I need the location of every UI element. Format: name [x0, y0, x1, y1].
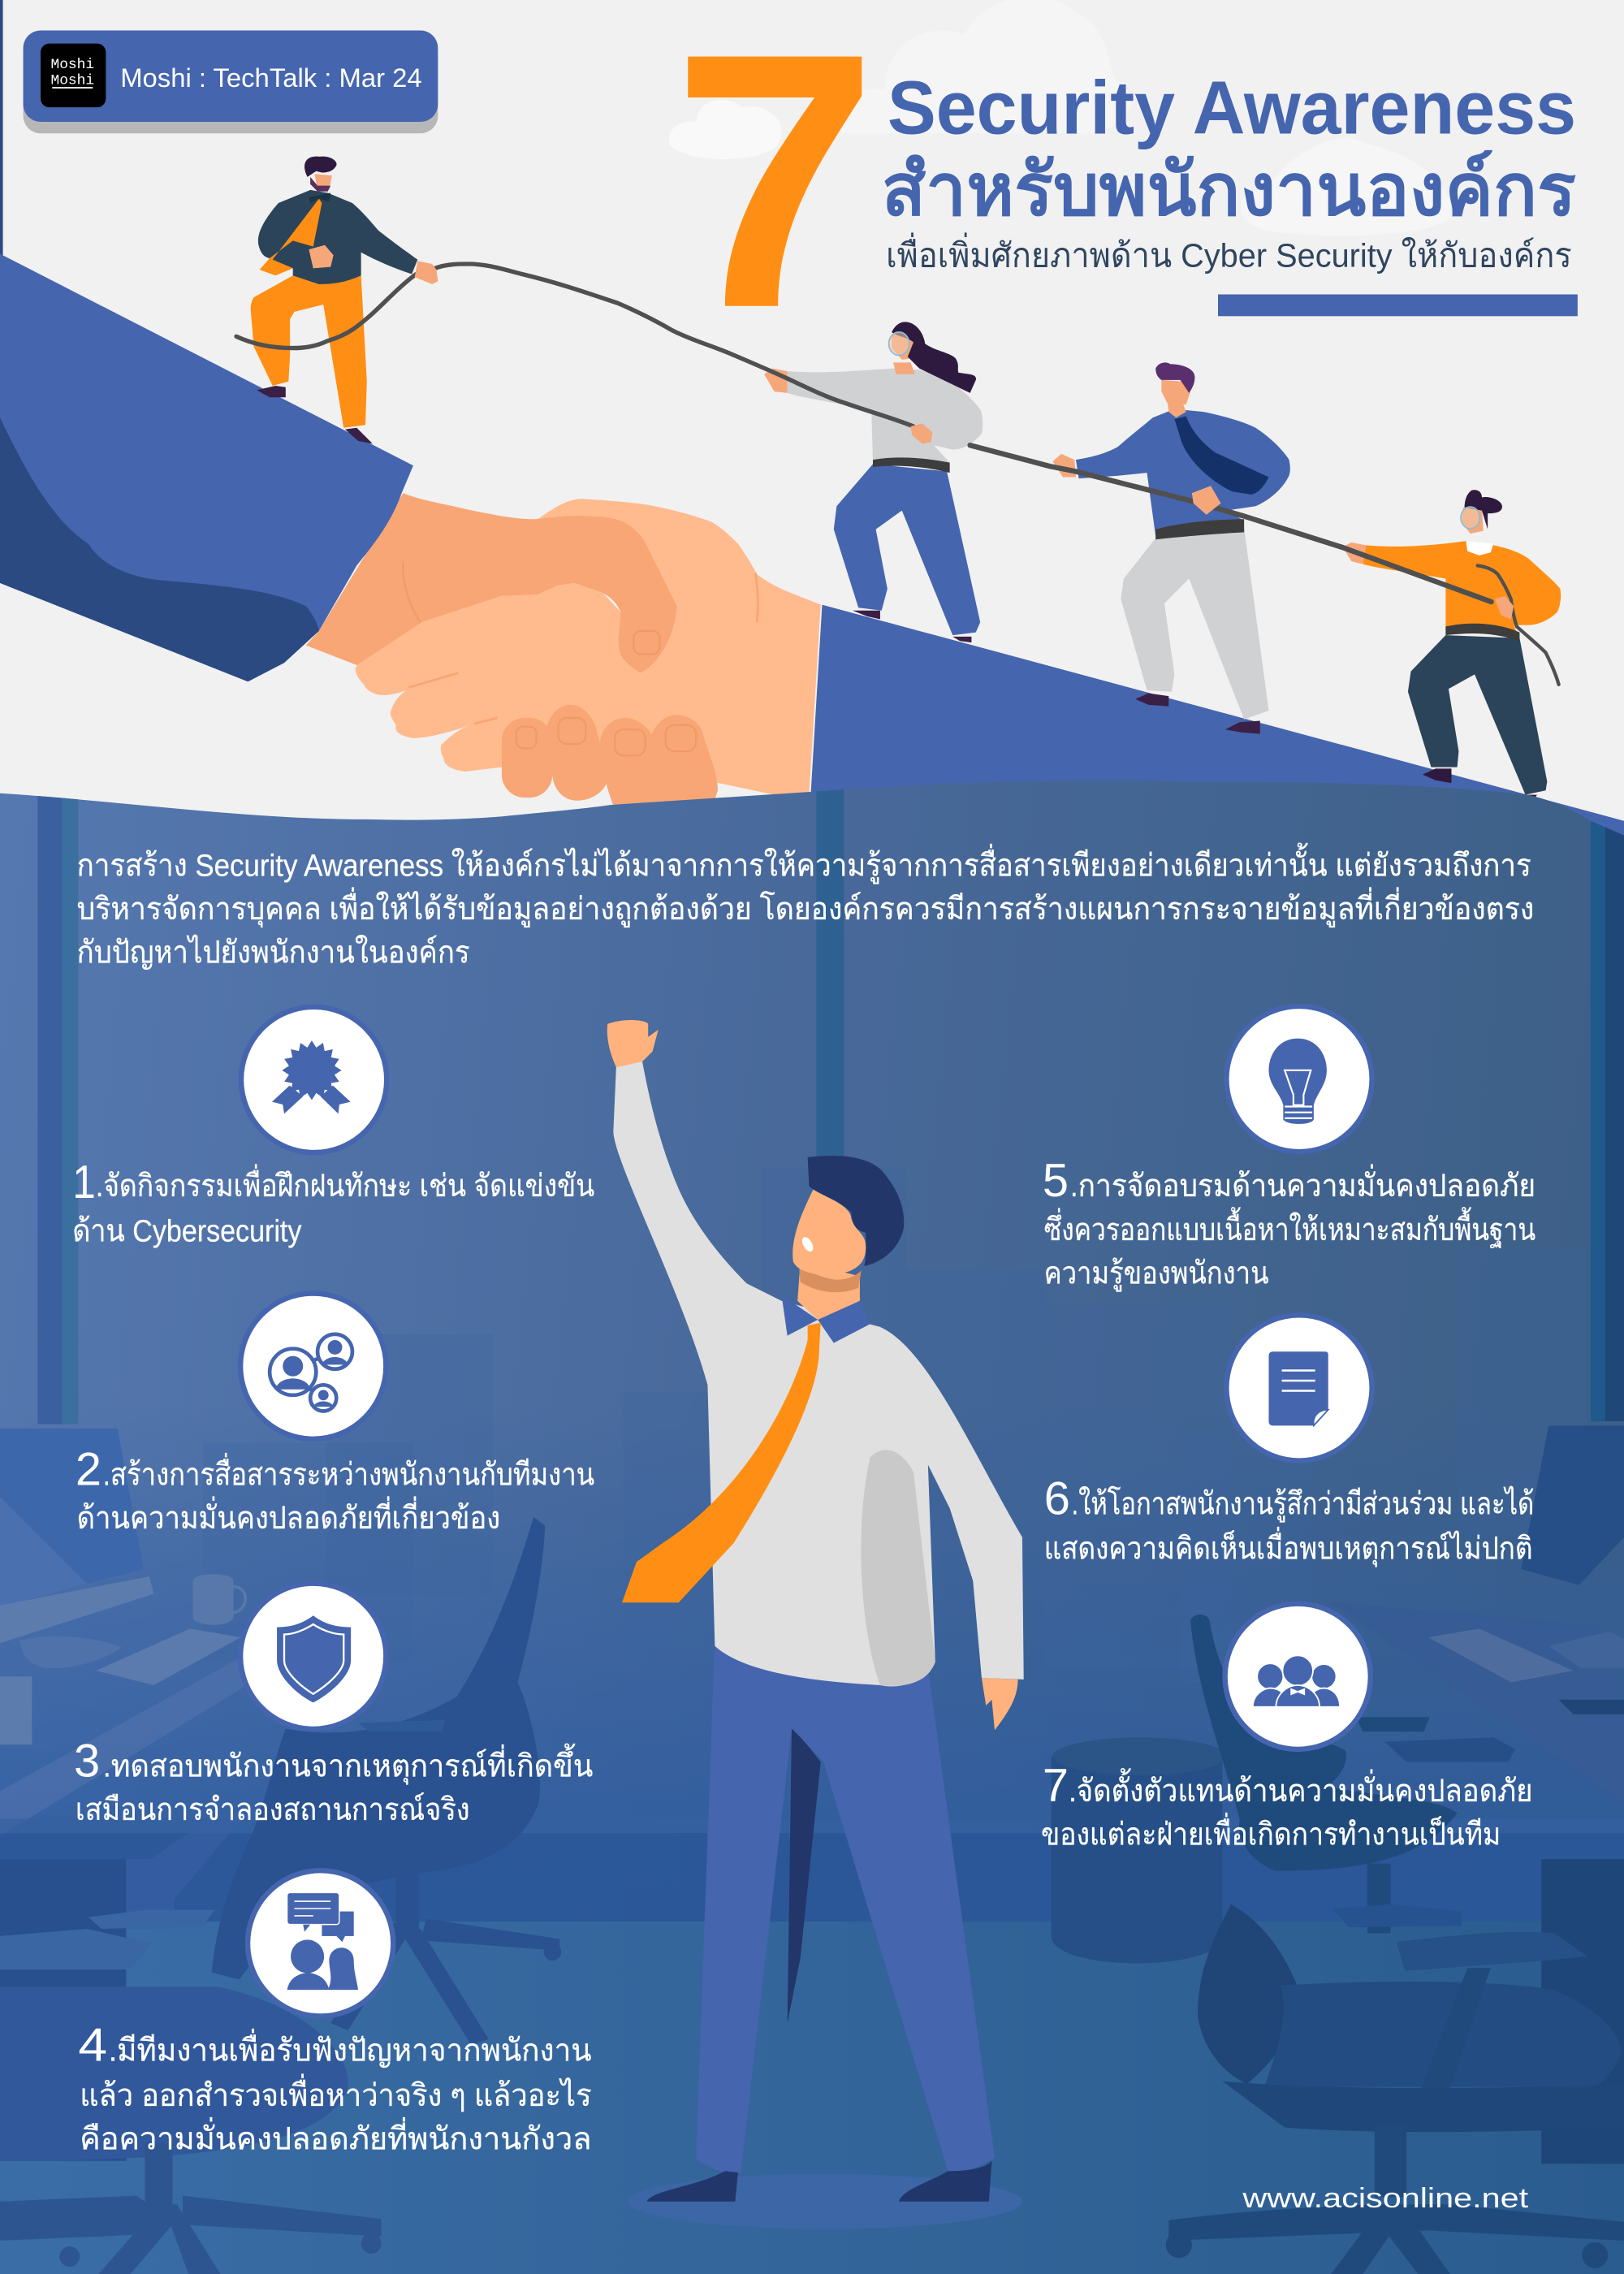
faded background blocks	[203, 1168, 1587, 1682]
website url: www.acisonline.net	[1242, 2183, 1529, 2214]
icon: document	[1226, 1315, 1372, 1461]
wall gradient	[0, 780, 1624, 1922]
figure: man with beard on the left sleeve	[251, 157, 417, 443]
raised fist	[607, 1020, 659, 1067]
text: item 3: .ทดสอบพนักงานจากเหตุการณ์ที่เกิดขึ้น	[103, 1744, 593, 1785]
text: item 1: 1	[72, 1156, 96, 1208]
badge text: Moshi : TechTalk : Mar 24	[120, 63, 422, 93]
text: item 2	[76, 1444, 594, 1536]
figure: man in blue shirt with bag	[1052, 362, 1290, 734]
title: เพื่อเพิ่มศักยภาพด้าน Cyber Security ให้กับองค์กร	[886, 233, 1572, 275]
figure: woman in orange shirt	[1343, 490, 1561, 799]
wall-floor bands	[0, 1819, 28, 1833]
text: item 1	[72, 1156, 594, 1249]
text: item 5: ซึ่งควรออกแบบเนื้อหาให้เหมาะสมกับพื้นฐาน	[1044, 1207, 1535, 1248]
chair D, right bottom	[1166, 1904, 1624, 2274]
text: item 5: .การจัดอบรมด้านความมั่นคงปลอดภัย	[1070, 1164, 1535, 1204]
rope	[236, 264, 1559, 685]
icon: team of three	[1225, 1604, 1371, 1749]
title	[882, 65, 1576, 275]
text: item 5: ความรู้ของพนักงาน	[1044, 1256, 1269, 1291]
title: สำหรับพนักงานองค์กร	[882, 149, 1576, 230]
icon: connected people	[240, 1293, 386, 1439]
text: item 4: 4	[78, 2020, 107, 2072]
icon: light bulb	[1226, 1006, 1372, 1152]
shoes	[646, 2161, 991, 2202]
chair A, left middle	[0, 1517, 561, 2045]
text: item 4	[78, 2019, 592, 2156]
lower hand	[982, 1678, 1018, 1730]
inner leg shadow	[788, 1729, 821, 2023]
floor	[0, 1922, 1624, 2274]
text: item 4: แล้ว ออกสำรวจเพื่อหาว่าจริง ๆ แล้วอะไร	[80, 2073, 592, 2113]
left desk scene	[0, 1429, 247, 1819]
left sleeve	[0, 253, 413, 681]
text: item 7	[1041, 1760, 1533, 1852]
chair B, bottom left	[0, 1987, 382, 2274]
dark desk blocks	[0, 1859, 126, 2161]
figure hands holding rope	[309, 245, 1514, 619]
text: item 1: ด้าน Cybersecurity	[72, 1214, 302, 1249]
text: item 2: ด้านความมั่นคงปลอดภัยที่เกี่ยวข้อง	[77, 1496, 500, 1536]
face	[793, 1189, 866, 1276]
text: item 2: .สร้างการสื่อสารระหว่างพนักงานกับทีมงาน	[103, 1453, 594, 1493]
text: item 6: แสดงความคิดเห็นเมื่อพบเหตุการณ์ไม่ปกติ	[1044, 1527, 1533, 1567]
badge shadow	[24, 42, 438, 133]
text: item 5	[1043, 1155, 1535, 1291]
badge background	[24, 31, 438, 122]
text: item 7: 7	[1043, 1760, 1069, 1812]
hand: fingers	[502, 631, 718, 812]
text: item 4: .มีทีมงานเพื่อรับฟังปัญหาจากพนักงาน	[109, 2028, 592, 2068]
icon: award ribbon	[241, 1007, 387, 1152]
collar	[781, 1295, 870, 1343]
figure: main man raising fist	[607, 1020, 1024, 2202]
text: item 6	[1044, 1472, 1534, 1567]
intro text	[77, 843, 1534, 971]
trousers	[696, 1636, 995, 2173]
icon: shield	[240, 1584, 386, 1729]
text: item 3: เสมือนการจำลองสถานการณ์จริง	[76, 1792, 470, 1827]
text: item 1: .จัดกิจกรรมเพื่อฝึกฝนทักษะ เช่น จัดแข่งขัน	[96, 1164, 594, 1204]
columns	[37, 768, 63, 1424]
intro text: บริหารจัดการบุคคล เพื่อให้ได้รับข้อมูลอย่างถูกต้องด้วย โดยองค์กรควรมีการสร้างแผนการกระจายข้อมูลที่เกี่ยวข้องตรง	[77, 887, 1534, 927]
neck	[797, 1262, 860, 1323]
shirt	[613, 1061, 1024, 1686]
text: item 4: คือความมั่นคงปลอดภัยที่พนักงานกังวล	[80, 2116, 592, 2156]
tie	[622, 1323, 821, 1602]
figure: woman in grey sweater	[764, 322, 983, 642]
logo	[41, 44, 106, 107]
text: item 2: 2	[76, 1444, 102, 1496]
text: item 7: .จัดตั้งตัวแทนด้านความมั่นคงปลอดภัย	[1069, 1768, 1533, 1809]
panel: lower blue office background	[0, 768, 1624, 2274]
intro text: กับปัญหาไปยังพนักงานในองค์กร	[77, 935, 470, 971]
shirt shadow	[861, 1450, 935, 1686]
title: Security Awareness	[888, 65, 1576, 149]
text: item 6: 6	[1044, 1472, 1070, 1524]
background clouds	[669, 0, 1451, 236]
right desk scene	[1428, 1426, 1624, 1714]
hand: back hand, darker	[306, 493, 677, 673]
right sleeve	[806, 605, 1624, 870]
chair C, right middle	[1190, 1615, 1515, 1933]
logo: Moshi	[51, 73, 94, 89]
icon: team talk	[248, 1870, 393, 2017]
text: item 3: 3	[74, 1736, 100, 1788]
figure: shadow under man	[628, 2174, 1022, 2229]
storage drum	[1052, 1737, 1227, 1963]
hand: front hand, lighter	[356, 499, 821, 795]
badge	[24, 31, 438, 133]
title underline bar	[1218, 294, 1578, 316]
text: item 3	[74, 1735, 593, 1827]
left edge stripe	[0, 0, 3, 258]
logo: Moshi	[51, 57, 94, 73]
text: item 7: ของแต่ละฝ่ายเพื่อเกิดการทำงานเป็นทีม	[1041, 1812, 1501, 1852]
text: item 5: 5	[1043, 1155, 1069, 1207]
hair	[808, 1156, 904, 1266]
